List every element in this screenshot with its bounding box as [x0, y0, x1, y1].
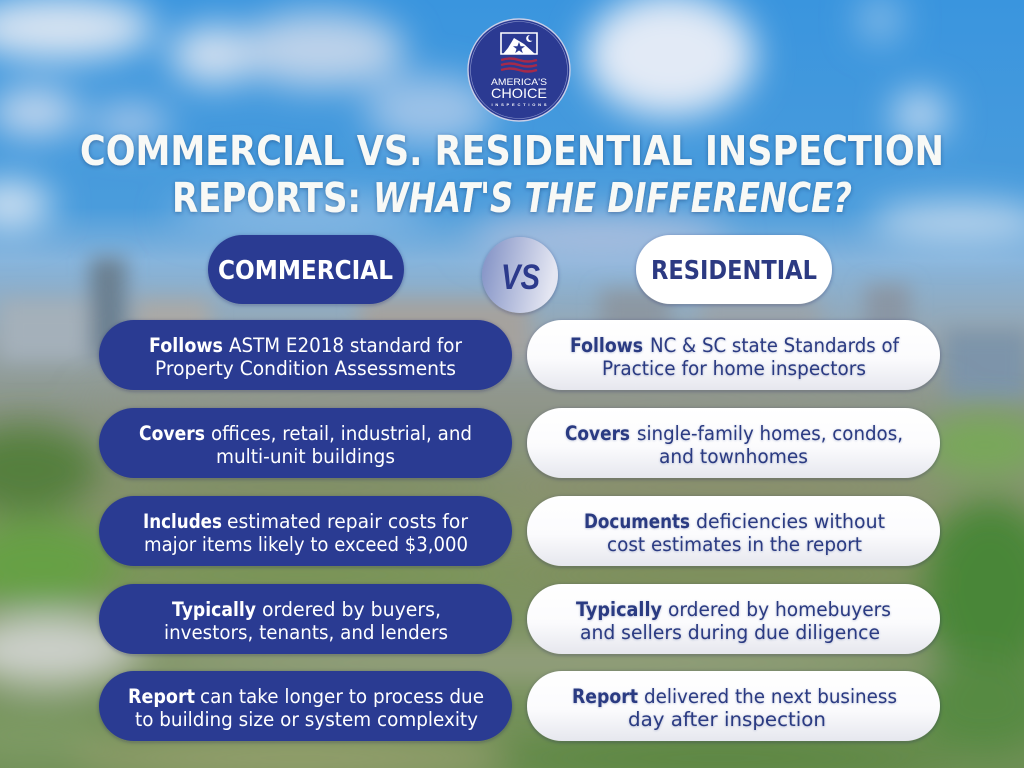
logo: America's Choice Inspections: CHOICE: [491, 85, 547, 101]
heading: residential: [636, 235, 832, 304]
heading: commercial: [208, 235, 404, 304]
panel: residential row 1: NC & SC state Standards of: [650, 334, 900, 357]
panel: commercial row 3: estimated repair costs for: [227, 510, 469, 533]
panel: residential row 3: Documents: [584, 510, 690, 533]
panel: commercial row 1: ASTM E2018 standard for: [229, 334, 463, 357]
panel: commercial row 1: Follows: [149, 334, 223, 357]
panel: commercial row 4: [99, 584, 512, 654]
panel: residential row 5: Report: [572, 685, 638, 708]
panel: residential row 4: ordered by homebuyers: [668, 598, 891, 621]
panel: commercial row 5: [99, 671, 512, 741]
panel: residential row 2: Covers: [565, 422, 630, 445]
panel: commercial row 5: Report: [128, 685, 195, 708]
vs badge: [482, 237, 558, 313]
panel: commercial row 2: multi-unit buildings: [216, 445, 395, 468]
panel: commercial row 1: [99, 320, 512, 390]
title: REPORTS:: [172, 174, 361, 222]
panel: commercial row 4: Typically: [172, 598, 256, 621]
panel: residential row 1: Follows: [570, 334, 643, 357]
panel: commercial row 4: investors, tenants, and lenders: [164, 621, 448, 644]
panel: residential row 4: Typically: [576, 598, 662, 621]
logo: America's Choice Inspections: [468, 19, 570, 121]
panel: residential row 2: and townhomes: [659, 445, 808, 468]
panel: commercial row 3: [99, 496, 512, 566]
panel: residential row 4: [527, 584, 940, 654]
panel: residential row 5: delivered the next business: [644, 685, 897, 708]
panel: residential row 3: cost estimates in the report: [607, 533, 862, 556]
panel: commercial row 2: Covers: [139, 422, 205, 445]
panel: commercial row 5: can take longer to process due: [200, 685, 484, 708]
icon: house with star and moon: [501, 33, 537, 54]
heading: commercial: COMMERCIAL: [218, 256, 393, 286]
panel: commercial row 3: major items likely to exceed $3,000: [144, 533, 468, 556]
panel: commercial row 3: Includes: [143, 510, 222, 533]
panel: residential row 3: deficiencies without: [696, 510, 885, 533]
panel: residential row 4: and sellers during due diligence: [580, 621, 880, 644]
panel: commercial row 5: to building size or system complexity: [135, 708, 478, 731]
icon: red flag stripes: [501, 58, 537, 72]
panel: commercial row 1: Property Condition Assessments: [155, 357, 456, 380]
title: [80, 127, 944, 222]
panel: residential row 2: single-family homes, condos,: [637, 422, 903, 445]
panel: residential row 5: day after inspection: [628, 708, 826, 731]
panel: residential row 5: [527, 671, 940, 741]
heading: residential: RESIDENTIAL: [651, 256, 817, 286]
panel: commercial row 2: [99, 408, 512, 478]
logo: America's Choice Inspections: AMERICA'S: [491, 77, 547, 88]
panel: residential row 1: Practice for home inspectors: [602, 357, 866, 380]
panel: residential row 2: [527, 408, 940, 478]
panel: residential row 1: [527, 320, 940, 390]
panel: commercial row 2: offices, retail, industrial, and: [211, 422, 472, 445]
logo: America's Choice Inspections: INSPECTIONS: [492, 102, 547, 107]
panel: residential row 3: [527, 496, 940, 566]
panel: commercial row 4: ordered by buyers,: [262, 598, 441, 621]
vs badge: VS: [501, 258, 540, 297]
title: WHAT'S THE DIFFERENCE?: [373, 174, 852, 222]
